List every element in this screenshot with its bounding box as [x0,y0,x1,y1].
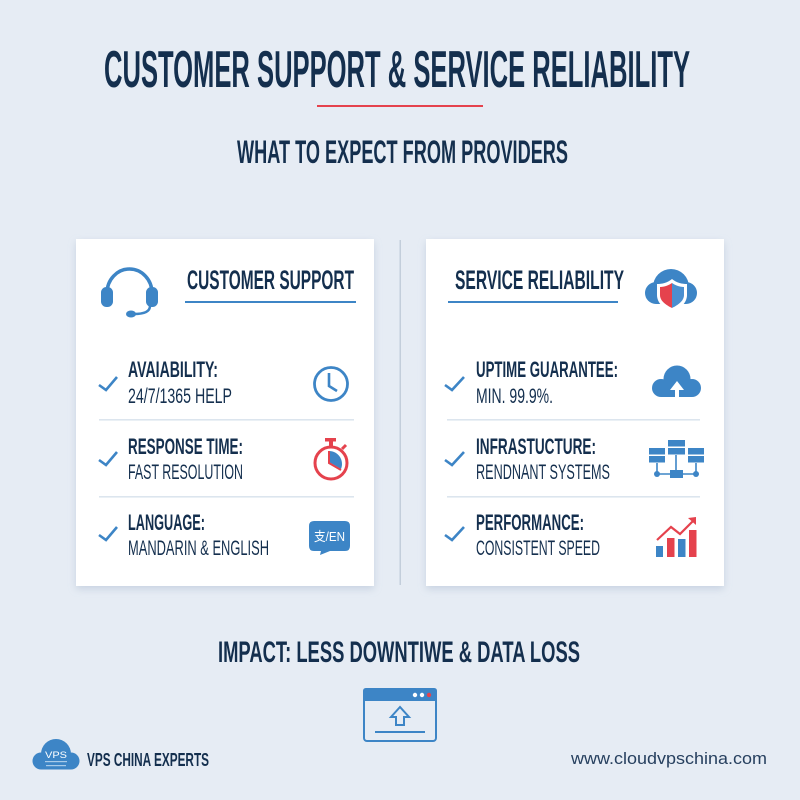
row: response time [99,434,347,484]
check icon [445,377,464,390]
logo cloud [32,739,80,770]
icon: headset [101,269,158,318]
value: FAST RESOLUTION [128,461,243,484]
icon: server network [649,440,704,478]
heading: service reliability: SERVICE RELIABILITY [455,265,624,295]
value: 24/7/1365 HELP [128,385,232,408]
value: RENDNANT SYSTEMS [476,461,610,484]
center divider [400,240,401,585]
icon: cloud upload [652,366,701,398]
icon: language bubble [309,521,350,555]
icon: cloud shield [645,269,697,312]
icon: clock [314,368,348,400]
title underline [317,105,483,107]
value: CONSISTENT SPEED [476,537,600,560]
check icon [99,377,117,390]
divider [99,496,354,498]
icon: bar chart with trend [656,517,696,557]
check icon [99,452,117,465]
heading: customer support: CUSTOMER SUPPORT [187,265,354,295]
label: LANGUAGE: [128,510,205,535]
impact statement: IMPACT: LESS DOWNTIWE & DATA LOSS [218,636,580,669]
check icon [99,527,117,540]
divider [447,419,700,421]
check icon [445,452,464,465]
logo cloud: VPS [45,750,67,761]
value: MANDARIN & ENGLISH [128,537,269,560]
row: performance [445,510,696,560]
heading rule [185,301,356,303]
value: MIN. 99.9%. [476,385,553,408]
label: INFRASTUCTURE: [476,434,596,459]
panel: customer support [76,239,374,586]
heading rule [448,301,618,303]
logo: VPS China Experts [32,739,209,770]
divider [447,496,700,498]
check icon [445,527,464,540]
website url: www.cloudvpschina.com [570,750,767,768]
row: availability [99,357,348,408]
row: language [99,510,350,560]
panel: service reliability [426,239,724,586]
logo wordmark: VPS CHINA EXPERTS [87,750,209,770]
icon: stopwatch [315,438,347,479]
icon: language bubble: 支/EN [314,529,345,544]
icon: browser window upload [363,688,437,741]
divider [99,419,354,421]
label: UPTIME GUARANTEE: [476,357,618,382]
label: RESPONSE TIME: [128,434,243,459]
row: uptime guarantee [445,357,701,408]
row: infrastructure [445,434,704,484]
label: PERFORMANCE: [476,510,584,535]
label: AVAIABILITY: [128,357,218,382]
